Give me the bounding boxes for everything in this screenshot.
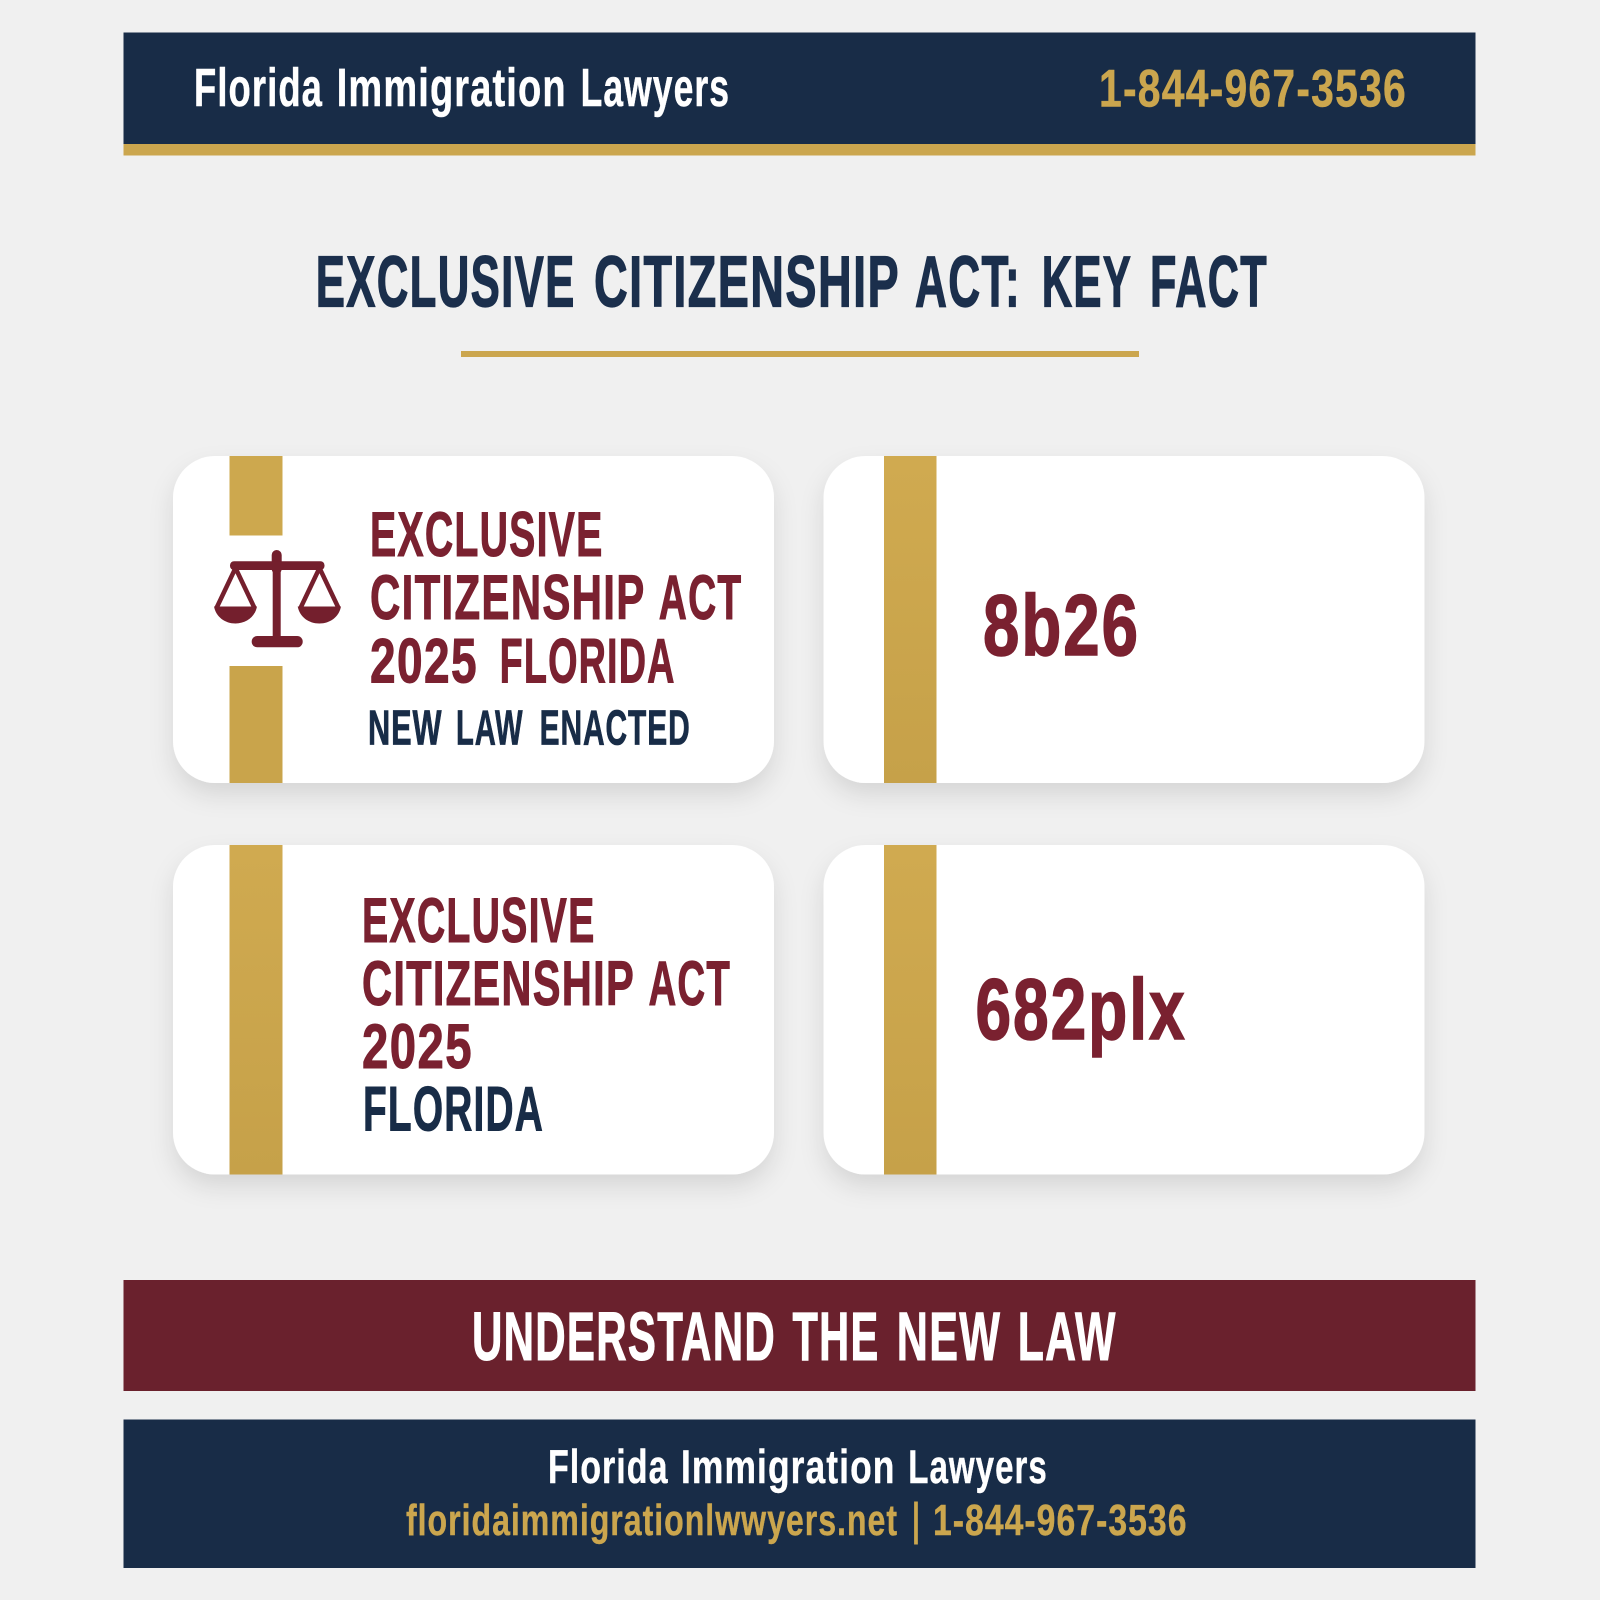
footer firm name xyxy=(548,1440,1048,1493)
gold stripe xyxy=(230,845,282,1174)
card subheading: LAW xyxy=(456,702,524,756)
card heading text: EXCLUSIVE xyxy=(362,886,596,956)
card heading text: ACT xyxy=(659,563,742,633)
card heading text xyxy=(370,500,742,696)
card value: 8b26 xyxy=(983,578,1140,674)
banner text: LAW xyxy=(1018,1298,1117,1375)
header phone number: 1-844-967-3536 xyxy=(1099,60,1407,118)
card heading text: EXCLUSIVE xyxy=(370,500,604,570)
panel: card top left xyxy=(173,456,774,783)
card subheading: FLORIDA xyxy=(363,1074,544,1144)
call to action banner xyxy=(124,1280,1476,1391)
card heading text: 2025 xyxy=(370,626,478,696)
banner text: THE xyxy=(792,1298,880,1375)
banner text: UNDERSTAND xyxy=(472,1298,776,1375)
banner text: NEW xyxy=(897,1298,1001,1375)
gold stripe xyxy=(884,845,936,1174)
footer bar xyxy=(124,1420,1476,1568)
card heading text: CITIZENSHIP xyxy=(362,949,635,1019)
main title xyxy=(316,243,1268,323)
footer firm name: Florida xyxy=(548,1440,668,1493)
gold stripe upper xyxy=(230,456,282,536)
title underline xyxy=(461,351,1139,357)
gold stripe lower xyxy=(230,666,282,783)
footer website and phone: 1-844-967-3536 xyxy=(933,1496,1188,1545)
footer firm name: Immigration xyxy=(681,1440,896,1493)
footer firm name: Lawyers xyxy=(908,1440,1048,1493)
card value: 682plx xyxy=(976,962,1186,1058)
header firm name: Immigration xyxy=(337,58,567,118)
panel: card top right xyxy=(824,456,1424,783)
main title: ACT: xyxy=(915,243,1021,323)
card heading text: FLORIDA xyxy=(500,626,676,696)
card heading text: CITIZENSHIP xyxy=(370,563,646,633)
icon: scales of justice xyxy=(214,550,341,647)
card subheading: NEW xyxy=(368,702,442,756)
card heading text: ACT xyxy=(648,949,731,1019)
footer website and phone: | xyxy=(910,1493,922,1545)
header firm name: Florida xyxy=(194,58,323,118)
main title: CITIZENSHIP xyxy=(594,243,900,323)
header bar xyxy=(124,32,1476,156)
header firm name xyxy=(194,58,730,118)
main title: FACT xyxy=(1150,243,1268,323)
main title: EXCLUSIVE xyxy=(316,243,576,323)
gold stripe xyxy=(884,456,936,783)
card heading text xyxy=(362,886,731,1082)
card heading text: 2025 xyxy=(362,1012,473,1082)
panel: card bottom right xyxy=(824,845,1424,1174)
card subheading xyxy=(368,702,691,756)
main title: KEY xyxy=(1042,243,1132,323)
header firm name: Lawyers xyxy=(581,58,730,118)
footer website and phone: floridaimmigrationlwwyers.net xyxy=(406,1496,898,1545)
panel: card bottom left xyxy=(173,845,774,1174)
card subheading: ENACTED xyxy=(540,702,691,756)
